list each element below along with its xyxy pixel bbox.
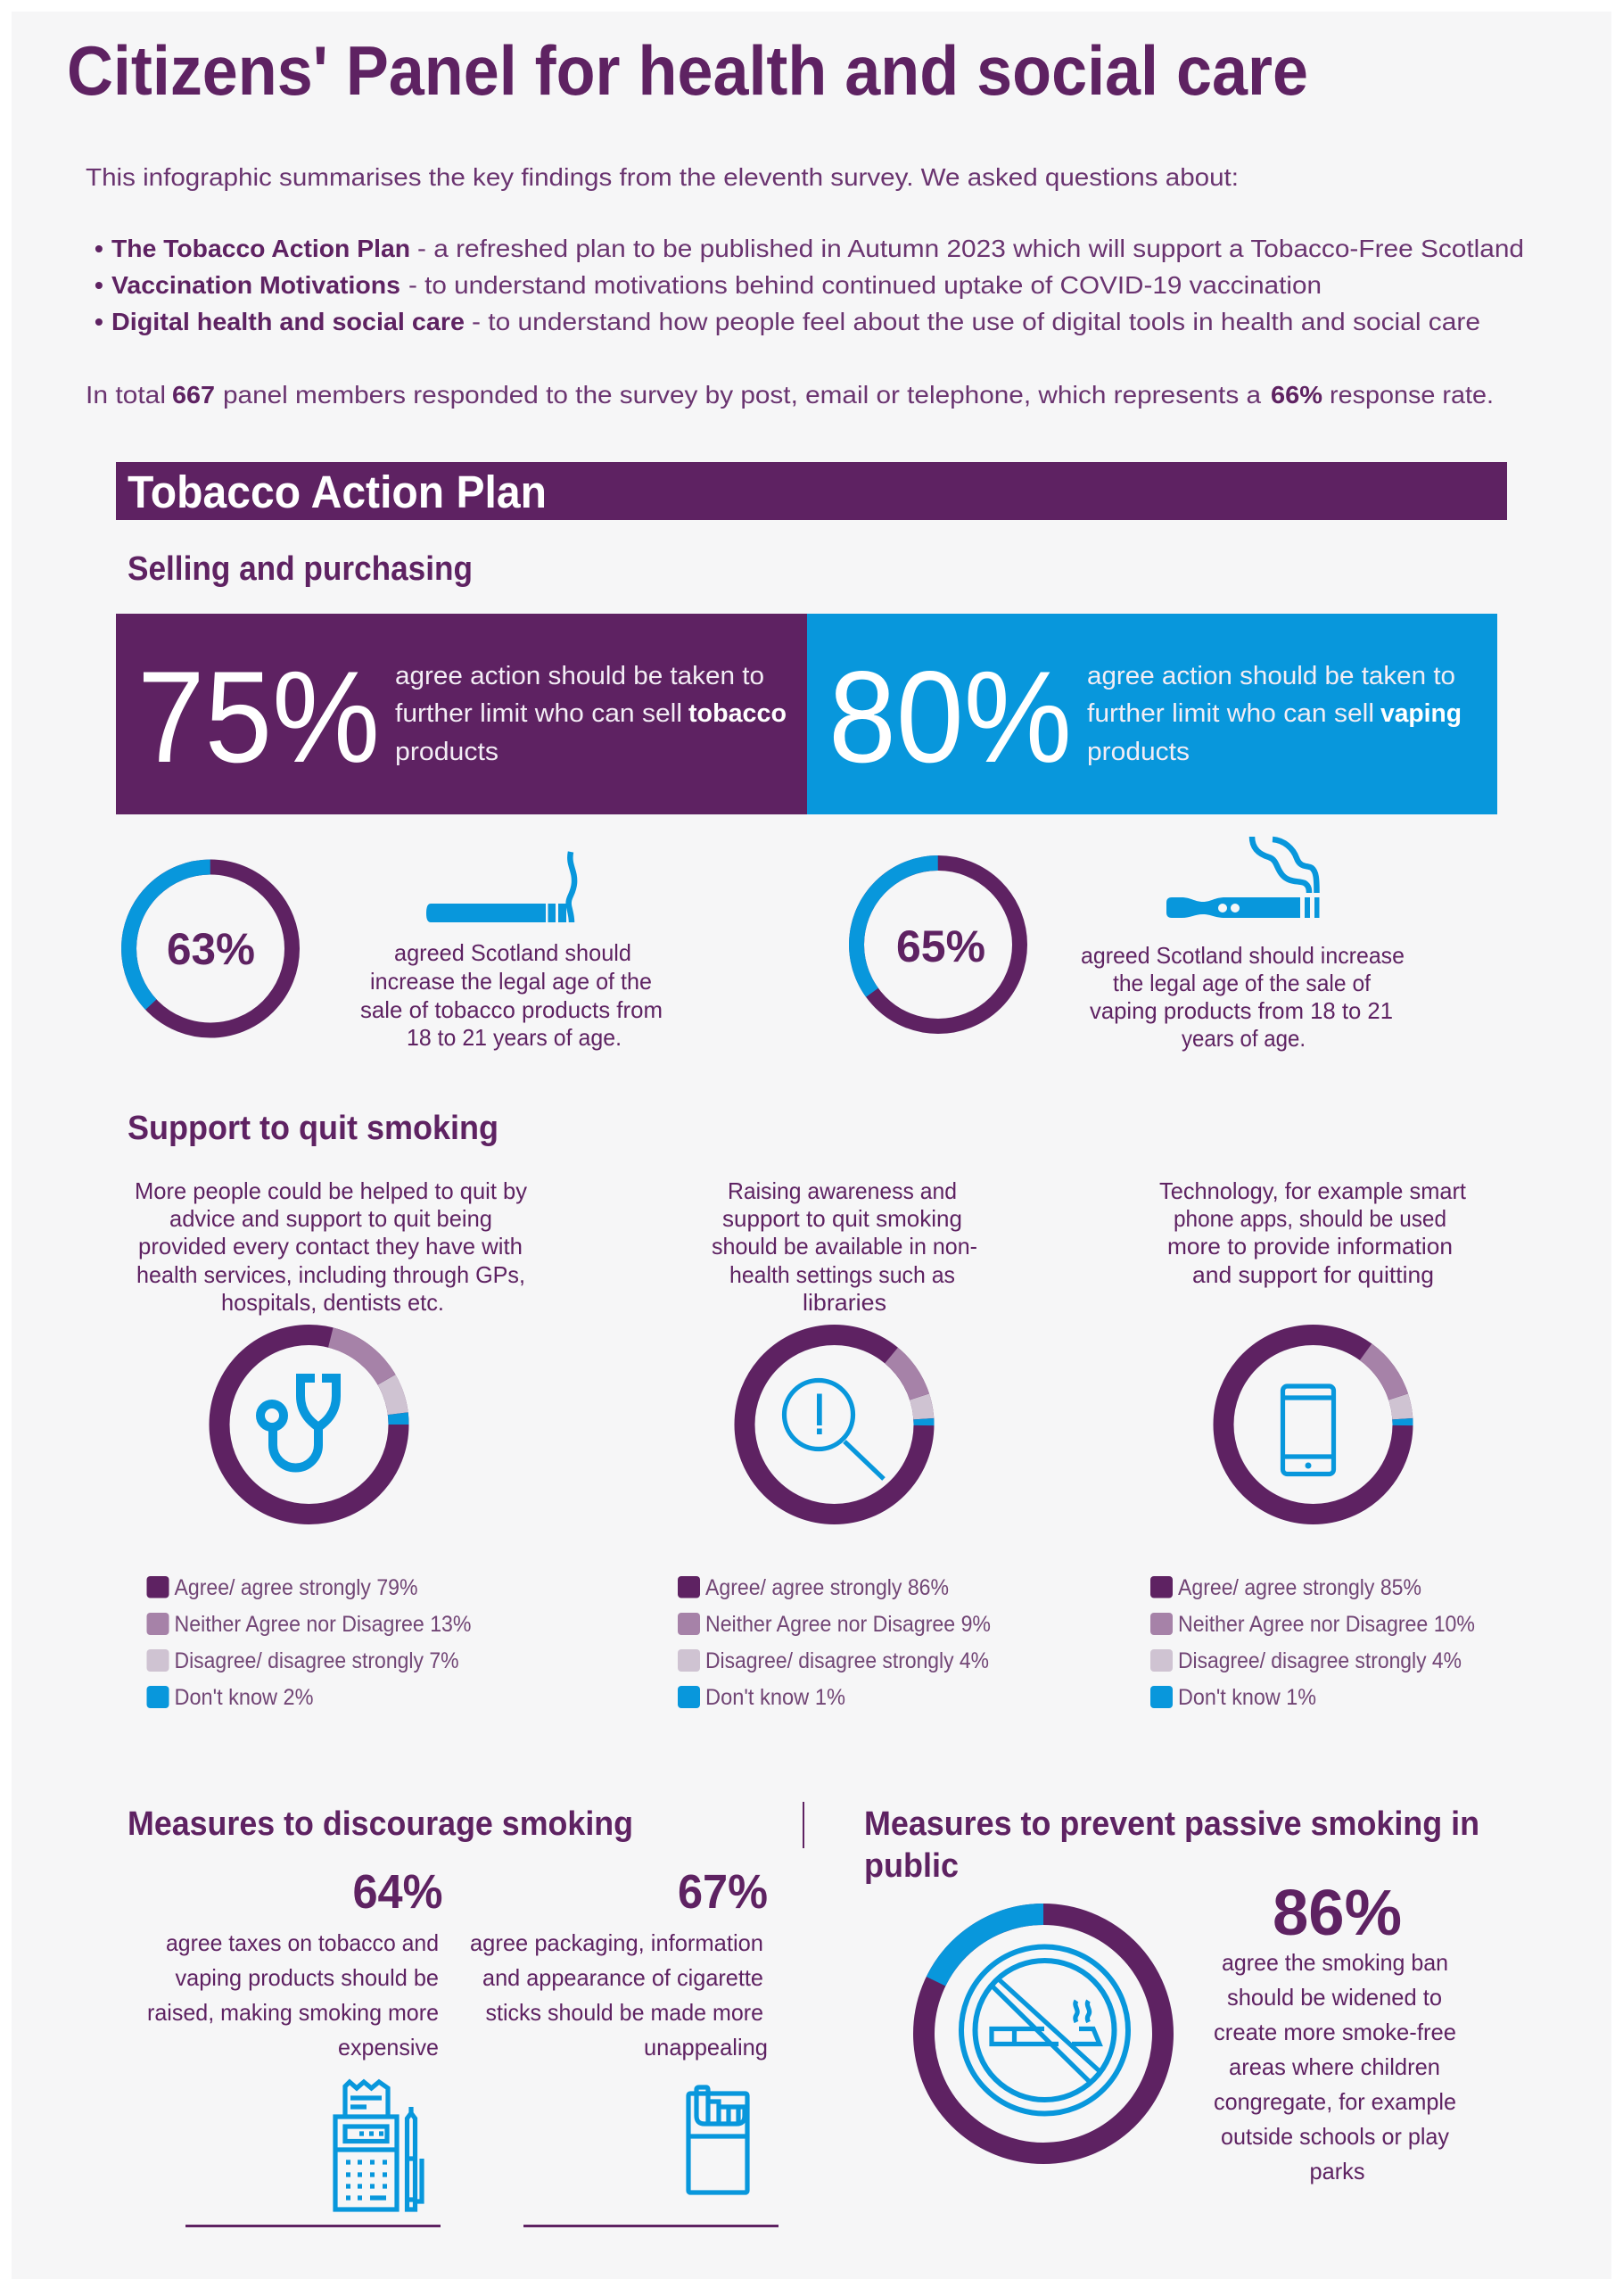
stat: 67% packaging: 67% — [678, 1865, 768, 1919]
donut chart: technology — [1188, 1300, 1438, 1549]
stat: 86% smoking ban: congregate, for example — [1214, 2088, 1456, 2115]
text: vaping age: vaping products from 18 to 21 — [1090, 997, 1393, 1024]
panel: 80% vaping stat — [807, 614, 1497, 814]
divider line: 64% — [185, 2225, 441, 2227]
text: advice and support: More people could be helped to quit by — [135, 1177, 527, 1204]
legend: raising awareness — [678, 1575, 991, 1710]
panel: 80% vaping stat: 80% — [828, 644, 1072, 789]
stat: 64% taxes: raised, making smoking more — [147, 1999, 439, 2026]
intro text block — [86, 163, 1524, 409]
text: vaping age: years of age. — [1182, 1025, 1306, 1052]
text: raising awareness: libraries — [803, 1289, 886, 1316]
panel: 75% tobacco stat: tobacco — [688, 699, 787, 728]
stat: 86% smoking ban: areas where children — [1229, 2053, 1440, 2080]
donut chart: 63% tobacco age — [95, 833, 325, 1064]
text: tobacco age: agreed Scotland should — [394, 939, 631, 966]
legend: advice and support: Neither Agree nor Disagree 13% — [175, 1612, 471, 1637]
intro text block: This infographic summarises the key findings from the eleventh survey. We asked questions about: — [86, 163, 1239, 191]
panel: 80% vaping stat: vaping — [1380, 699, 1462, 728]
intro text block: panel members responded to the survey by post, email or telephone, which represents a — [223, 381, 1261, 409]
intro text block: 667 — [172, 381, 215, 409]
legend: advice and support: Don't know 2% — [175, 1685, 314, 1710]
icon: magnifying glass — [785, 1381, 884, 1479]
heading: Measures to prevent passive smoking in public: public — [864, 1847, 959, 1885]
legend: technology: Disagree/ disagree strongly 4% — [1178, 1648, 1462, 1673]
stat: 64% taxes: expensive — [338, 2034, 439, 2061]
text: vaping age — [1081, 942, 1405, 1052]
legend: technology: Agree/ agree strongly 85% — [1178, 1575, 1421, 1600]
text: raising awareness: support to quit smoking — [722, 1205, 962, 1232]
text: vaping age: agreed Scotland should increase — [1081, 942, 1405, 969]
text: tobacco age: sale of tobacco products from — [360, 996, 663, 1023]
legend: raising awareness: Agree/ agree strongly 86% — [705, 1575, 949, 1600]
stat: 86% smoking ban: agree the smoking ban — [1222, 1949, 1448, 1976]
stat: 86% smoking ban: 86% — [1273, 1878, 1402, 1949]
icon: cigarette — [426, 852, 574, 922]
stat: 67% packaging: agree packaging, information — [470, 1929, 763, 1956]
vertical divider — [803, 1802, 804, 1848]
section banner: Tobacco Action Plan: Tobacco Action Plan — [128, 467, 547, 517]
icon: stethoscope — [260, 1378, 336, 1468]
icon: smartphone — [1282, 1386, 1334, 1474]
intro text block: Digital health and social care — [111, 308, 465, 335]
text: tobacco age — [360, 939, 663, 1051]
intro text block: In total — [86, 381, 166, 409]
panel: 80% vaping stat: further limit who can sell — [1087, 699, 1374, 728]
text: raising awareness: should be available in non- — [712, 1233, 977, 1259]
text: tobacco age: 18 to 21 years of age. — [407, 1024, 622, 1051]
text: technology: more to provide information — [1167, 1233, 1453, 1259]
legend: technology: Neither Agree nor Disagree 10% — [1178, 1612, 1475, 1637]
text: raising awareness: health settings such as — [729, 1261, 955, 1288]
legend: advice and support: Disagree/ disagree strongly 7% — [175, 1648, 458, 1673]
stat: 67% packaging: unappealing — [644, 2034, 768, 2061]
panel: 80% vaping stat: products — [1087, 738, 1190, 766]
intro text block: - to understand how people feel about the use of digital tools in health and social care — [472, 308, 1480, 335]
heading: Measures to discourage smoking: Measures to discourage smoking — [128, 1805, 633, 1843]
intro text block: - to understand motivations behind continued uptake of COVID-19 vaccination — [408, 271, 1322, 299]
text: raising awareness: Raising awareness and — [728, 1177, 957, 1204]
intro text block: • — [95, 271, 103, 299]
text: tobacco age: increase the legal age of the — [370, 968, 652, 995]
text: advice and support: advice and support to quit being — [169, 1205, 492, 1232]
panel: 75% tobacco stat: products — [395, 738, 498, 766]
legend: raising awareness: Don't know 1% — [705, 1685, 845, 1710]
title: Citizens' Panel for health and social care — [67, 31, 1308, 110]
stat: 67% packaging: sticks should be made more — [485, 1999, 763, 2026]
divider line: 67% — [523, 2225, 779, 2227]
stat: 86% smoking ban: outside schools or play — [1221, 2123, 1449, 2150]
text: advice and support: hospitals, dentists etc. — [221, 1289, 444, 1316]
intro text block: • — [95, 235, 103, 262]
stat: 86% smoking ban: create more smoke-free — [1214, 2019, 1456, 2045]
icon: cigarette pack — [688, 2087, 747, 2193]
intro text block: The Tobacco Action Plan — [111, 235, 410, 262]
section banner: Tobacco Action Plan — [116, 462, 1507, 520]
legend: advice and support: Agree/ agree strongly 79% — [175, 1575, 417, 1600]
intro text block: - a refreshed plan to be published in Autumn 2023 which will support a Tobacco-Free Scotland — [417, 235, 1524, 262]
text: technology: Technology, for example smart — [1159, 1177, 1467, 1204]
heading: Measures to prevent passive smoking in public — [864, 1805, 1479, 1885]
text: raising awareness — [712, 1177, 977, 1316]
intro text block: Vaccination Motivations — [111, 271, 400, 299]
stat: 64% taxes: vaping products should be — [175, 1964, 439, 1991]
stat: 86% smoking ban: should be widened to — [1227, 1984, 1442, 2011]
legend: technology — [1150, 1575, 1475, 1710]
legend: raising awareness: Neither Agree nor Disagree 9% — [705, 1612, 991, 1637]
panel: 75% tobacco stat — [116, 614, 808, 814]
stat: 86% smoking ban — [1214, 1878, 1456, 2185]
panel: 80% vaping stat: agree action should be taken to — [1087, 662, 1455, 690]
donut chart: advice and support — [186, 1302, 432, 1547]
donut chart: 65% vaping age — [824, 830, 1052, 1059]
heading: Measures to prevent passive smoking in public: Measures to prevent passive smoking in — [864, 1805, 1479, 1843]
panel: 75% tobacco stat: further limit who can sell — [395, 699, 682, 728]
icon: no smoking — [961, 1946, 1128, 2114]
text: technology: phone apps, should be used — [1174, 1205, 1446, 1232]
donut chart: 86% smoking ban — [884, 1874, 1203, 2193]
panel: 75% tobacco stat: agree action should be taken to — [395, 662, 764, 690]
heading: Support to quit smoking: Support to quit smoking — [128, 1110, 498, 1147]
text: vaping age: the legal age of the sale of — [1113, 970, 1372, 996]
stat: 86% smoking ban: parks — [1309, 2158, 1364, 2185]
heading: Selling and purchasing: Selling and purchasing — [128, 550, 473, 588]
stat: 67% packaging: and appearance of cigarette — [482, 1964, 763, 1991]
donut chart: 63% tobacco age: 63% — [167, 924, 255, 974]
intro text block: • — [95, 308, 103, 335]
text: advice and support: provided every contact they have with — [138, 1233, 523, 1259]
donut chart: raising awareness — [708, 1299, 960, 1550]
text: advice and support: health services, including through GPs, — [136, 1261, 525, 1288]
donut chart: 65% vaping age: 65% — [896, 921, 985, 971]
intro text block: 66% — [1271, 381, 1322, 409]
stat: 64% taxes — [147, 1865, 442, 2061]
stat: 64% taxes: agree taxes on tobacco and — [166, 1929, 439, 1956]
icon: vape — [1166, 837, 1320, 918]
intro text block: response rate. — [1330, 381, 1494, 409]
text: technology — [1159, 1177, 1467, 1288]
panel: 75% tobacco stat: 75% — [137, 644, 380, 789]
legend: technology: Don't know 1% — [1178, 1685, 1316, 1710]
legend: raising awareness: Disagree/ disagree strongly 4% — [705, 1648, 989, 1673]
stat: 67% packaging — [470, 1865, 768, 2061]
text: technology: and support for quitting — [1192, 1261, 1434, 1288]
text: advice and support — [135, 1177, 527, 1316]
icon: card terminal and pen — [335, 2082, 422, 2209]
legend: advice and support — [146, 1575, 471, 1710]
stat: 64% taxes: 64% — [353, 1865, 442, 1919]
